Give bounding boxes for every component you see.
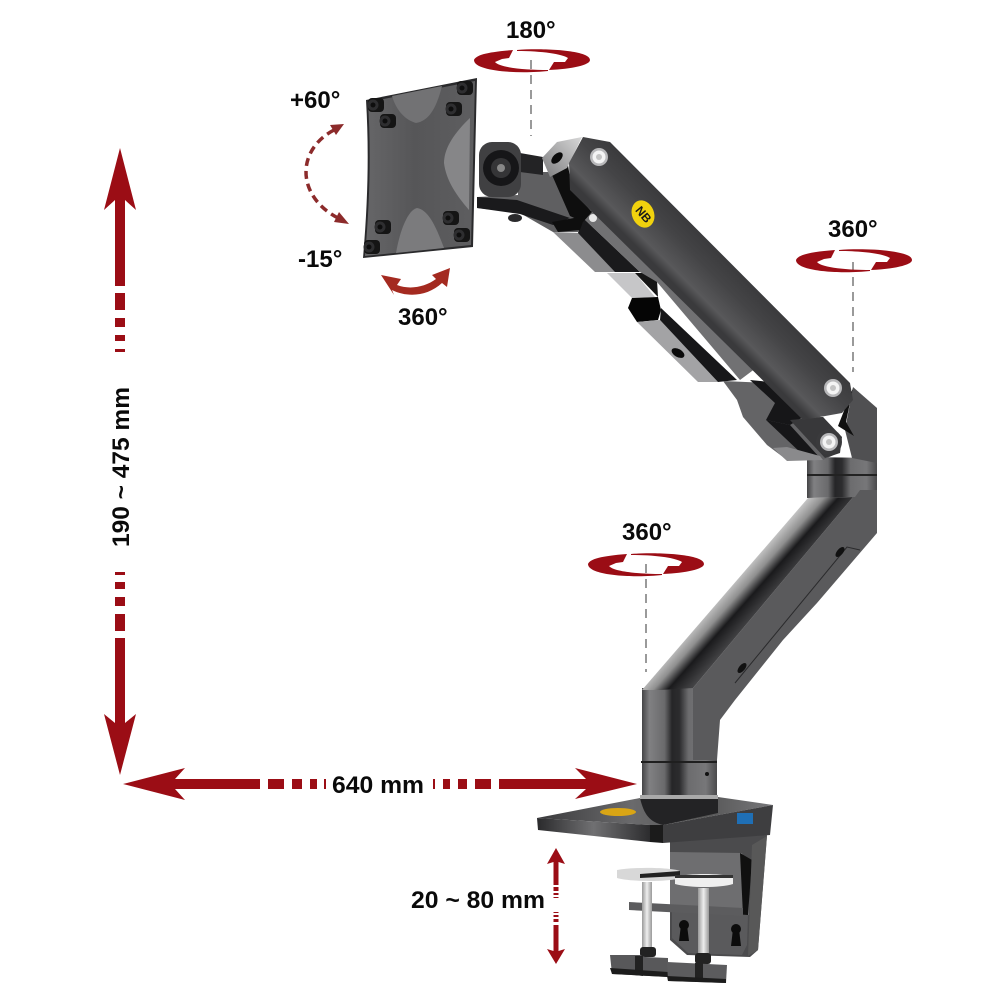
label: tilt up: +60°: [290, 87, 340, 114]
pressure disc right: [675, 874, 733, 887]
link: black notch: [635, 273, 658, 297]
gas spring cover: [569, 137, 853, 420]
link: elbow casting: [723, 381, 840, 460]
logo on base: [600, 808, 636, 816]
icon: rotation 180: [474, 49, 590, 72]
clamp body: [670, 835, 767, 957]
pivot: bottom: [824, 379, 842, 397]
logo: NB badge: [628, 197, 658, 231]
mounting pegs: [364, 81, 473, 254]
arrow: clamp thickness range: [547, 848, 565, 964]
clamp: [610, 835, 767, 983]
tightening knob left: [610, 947, 668, 977]
link: hole: [670, 346, 686, 360]
pivot: top: [590, 148, 608, 166]
threaded screw right: [698, 888, 709, 956]
link: octagon opening: [628, 297, 661, 322]
label: 180 degrees: 180°: [506, 17, 556, 44]
swivel hinge: [542, 137, 582, 177]
elbow joint: [807, 387, 877, 498]
dashed axis: base swivel: [645, 564, 647, 672]
label: tilt down: -15°: [298, 246, 342, 273]
arrow: tilt range: [306, 124, 349, 224]
upper arm lower link: [553, 205, 842, 461]
link: black strip left: [578, 217, 640, 272]
pressure disc left: [617, 868, 680, 881]
label: clamp range: 20 ~ 80 mm: [411, 887, 545, 914]
link: light silver plate: [607, 273, 655, 298]
icon: rotation elbow 360: [796, 249, 912, 272]
VESA plate: [363, 78, 477, 258]
link: black strip right: [660, 308, 737, 382]
tightening knob right: [667, 953, 727, 983]
label: elbow 360 degrees: 360°: [828, 216, 878, 243]
arrow: reach 640 mm: [123, 768, 637, 800]
label: rotation 360 degrees: 360°: [398, 304, 448, 331]
port: USB: [737, 813, 753, 824]
lower arm: cable slot: [736, 661, 748, 675]
logo: NB badge: NB: [632, 203, 655, 226]
arrow: plate rotation: [381, 268, 450, 295]
dashed axis: head swivel: [530, 60, 532, 136]
threaded screw left: [642, 882, 652, 950]
label: reach: 640 mm: [332, 772, 424, 799]
icon: rotation base 360: [588, 553, 704, 576]
lower arm: upper slot: [834, 545, 846, 559]
arrow: height range 190 to 475 mm: [104, 148, 136, 775]
label: height range: 190 ~ 475 mm: [108, 387, 135, 547]
keyholes: [679, 920, 741, 946]
dashed axis: elbow swivel: [852, 262, 854, 372]
base plate: [537, 795, 773, 843]
pivot ball: [479, 142, 521, 197]
link: outer grey plate: [553, 232, 617, 272]
column: [641, 688, 717, 802]
crossbar: [629, 902, 743, 916]
lower link pivot: [816, 429, 842, 455]
label: base 360 degrees: 360°: [622, 519, 672, 546]
tilt head bracket: [477, 137, 597, 232]
lower arm: [642, 487, 877, 760]
link: lower silver face: [637, 320, 718, 382]
